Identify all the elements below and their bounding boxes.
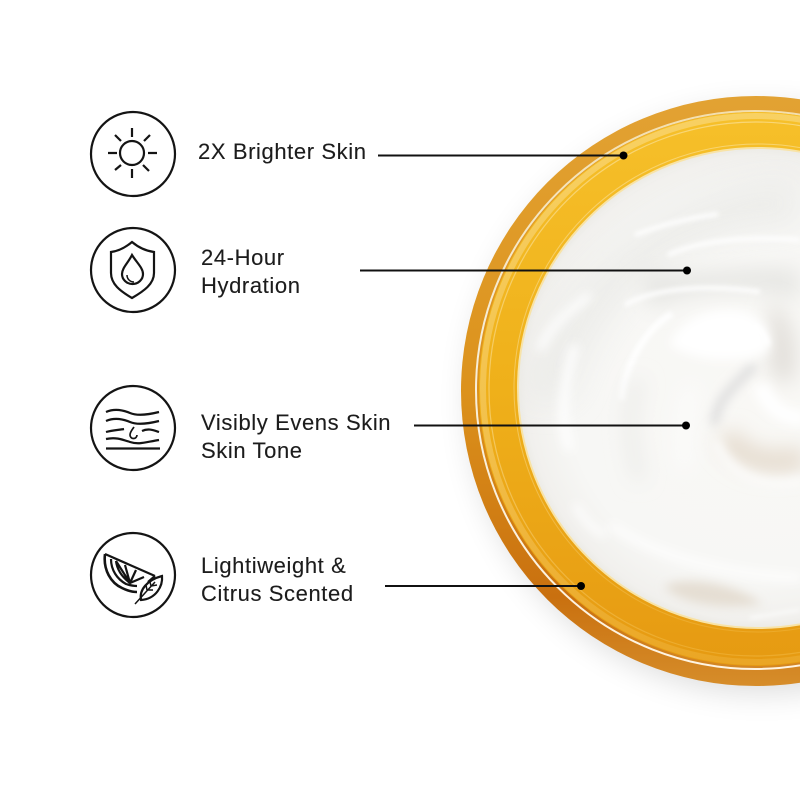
- benefit: Lightweight and Citrus Scented: [91, 533, 585, 617]
- cream jar: [461, 96, 800, 692]
- label: Lightiweight &: [201, 553, 346, 578]
- icon: citrus slice and leaf: [91, 533, 175, 617]
- icon: sun: [91, 112, 175, 196]
- label: Skin Tone: [201, 438, 303, 463]
- label: Citrus Scented: [201, 581, 354, 606]
- label: 2X Brighter Skin: [198, 139, 367, 164]
- pale rim lines: [483, 116, 800, 662]
- connector line: [414, 422, 690, 430]
- label: 24-Hour: [201, 245, 285, 270]
- cream surface: [518, 148, 800, 628]
- rim highlight: [476, 111, 800, 669]
- swirl highlights: [678, 315, 770, 355]
- benefit: Visibly Evens Skin Tone: [91, 386, 690, 470]
- connector line: [385, 582, 585, 590]
- jar shadow: [470, 108, 800, 692]
- icon: skin layers: [91, 386, 175, 470]
- yellow inner rim: [479, 112, 800, 666]
- connector line: [378, 152, 628, 160]
- swirl shadows: [770, 300, 796, 385]
- benefit: 24-Hour Hydration: [91, 228, 691, 312]
- label: Visibly Evens Skin: [201, 410, 391, 435]
- icon: shield with drop: [91, 228, 175, 312]
- cream swirl: [525, 180, 800, 618]
- benefit: 2X Brighter Skin: [91, 112, 628, 196]
- outer jar rim: [461, 96, 800, 686]
- label: Hydration: [201, 273, 301, 298]
- connector line: [360, 266, 691, 274]
